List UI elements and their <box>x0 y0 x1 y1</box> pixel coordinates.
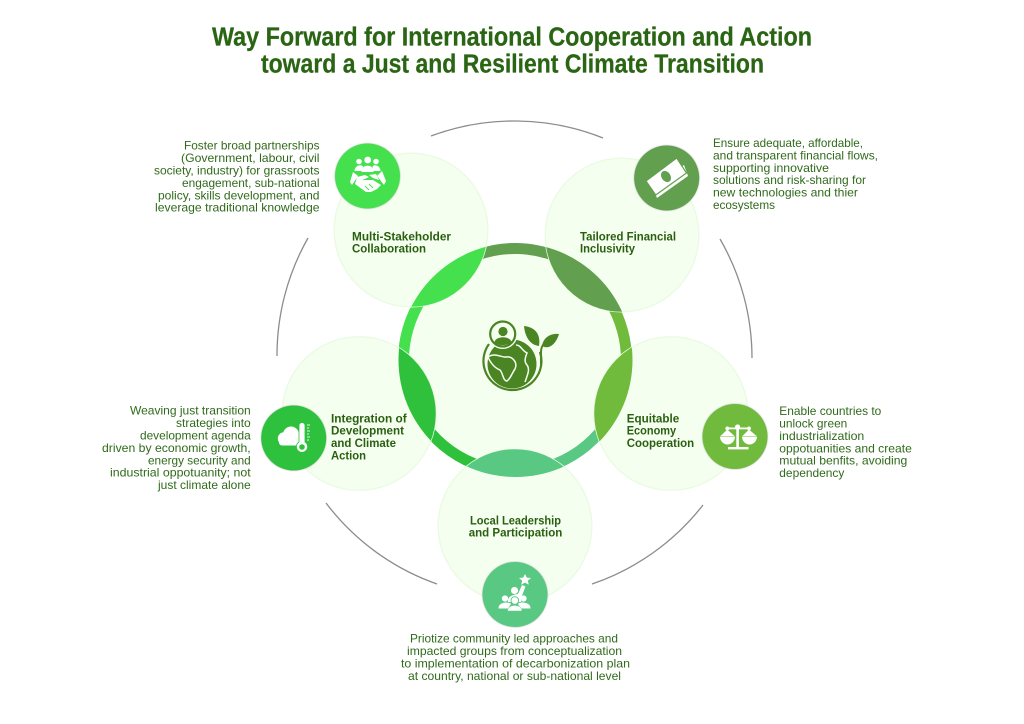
panel: Tailored Financial Inclusivity <box>545 136 878 312</box>
description: partnerships: leverage traditional knowledge <box>155 201 320 215</box>
description: green industrialization: Enable countries to <box>779 404 882 418</box>
description: financial flows: Ensure adequate, affordable, <box>713 136 863 150</box>
title: toward a Just and Resilient Climate Transition <box>261 50 764 78</box>
description: financial flows: solutions and risk-sharing for <box>713 173 866 187</box>
icon: people and handshake <box>335 144 400 208</box>
description: development agenda: industrial oppotuanity; not <box>110 466 251 480</box>
title <box>212 24 812 78</box>
description: financial flows: supporting innovative <box>713 161 829 175</box>
description: financial flows: new technologies and thier <box>713 186 858 200</box>
description: development agenda: energy security and <box>148 453 251 467</box>
label: Equitable Economy Cooperation <box>627 411 694 450</box>
icon: community with star <box>482 562 548 627</box>
description: development agenda: strategies into <box>176 416 251 430</box>
description: financial flows: and transparent financial flows, <box>713 148 878 162</box>
label: Multi-Stakeholder Collaboration <box>352 230 451 256</box>
label: Equitable Economy Cooperation: Equitable <box>627 411 680 425</box>
description: development agenda <box>102 404 251 492</box>
label: Local Leadership and Participation: Local Leadership <box>470 513 561 527</box>
panel: Equitable Economy Cooperation <box>594 337 912 490</box>
description: community led approaches: to implementation of decarbonization plan <box>401 656 630 670</box>
description: community led approaches: impacted groups from conceptualization <box>407 644 622 658</box>
description: partnerships <box>154 139 320 215</box>
icon: globe with person and leaves <box>483 319 559 390</box>
description: green industrialization: mutual benfits, avoiding <box>779 454 907 468</box>
label: Equitable Economy Cooperation: Economy <box>627 424 677 438</box>
panel: Local Leadership and Participation <box>401 449 630 683</box>
description: community led approaches <box>401 632 630 683</box>
description: financial flows <box>713 136 878 212</box>
description: community led approaches: at country, national or sub-national level <box>408 669 621 683</box>
label: Integration of Development and Climate Action: Integration of <box>331 411 407 425</box>
description: green industrialization <box>779 404 912 480</box>
label: Integration of Development and Climate Action <box>331 411 407 462</box>
panel: Multi-Stakeholder Collaboration <box>154 139 488 307</box>
label: Integration of Development and Climate Action: Action <box>331 448 366 462</box>
label: Integration of Development and Climate Action: Development <box>331 424 404 438</box>
icon: banknotes <box>634 146 699 210</box>
description: development agenda: just climate alone <box>157 478 251 492</box>
label: Tailored Financial Inclusivity: Inclusivity <box>580 242 635 256</box>
description: financial flows: ecosystems <box>713 198 775 212</box>
description: partnerships: Foster broad partnerships <box>184 139 320 153</box>
panel: Integration of Development and Climate Action <box>102 337 436 492</box>
description: partnerships: engagement, sub-national <box>182 176 320 190</box>
label: Tailored Financial Inclusivity: Tailored Financial <box>580 230 676 244</box>
label: Equitable Economy Cooperation: Cooperation <box>627 436 694 450</box>
label: Multi-Stakeholder Collaboration: Multi-Stakeholder <box>352 230 451 244</box>
description: development agenda: driven by economic growth, <box>102 441 251 455</box>
title: Way Forward for International Cooperation and Action <box>212 24 812 52</box>
description: green industrialization: dependency <box>779 466 844 480</box>
description: partnerships: society, industry) for grassroots <box>154 164 320 178</box>
central hub ring <box>404 248 626 472</box>
label: Tailored Financial Inclusivity <box>580 230 676 256</box>
description: green industrialization: unlock green <box>779 416 847 430</box>
description: partnerships: (Government, labour, civil <box>181 151 320 165</box>
icon: balance scales <box>702 404 768 469</box>
description: development agenda: Weaving just transition <box>130 404 251 418</box>
description: community led approaches: Priotize community led approaches and <box>410 632 618 646</box>
label: Local Leadership and Participation: and Participation <box>469 526 562 540</box>
description: green industrialization: industrialization <box>779 429 864 443</box>
outer grey arcs <box>277 121 752 584</box>
description: development agenda: development agenda <box>140 428 251 442</box>
label: Multi-Stakeholder Collaboration: Collaboration <box>352 242 426 256</box>
description: green industrialization: oppotuanities and create <box>779 441 912 455</box>
label: Integration of Development and Climate Action: and Climate <box>331 436 396 450</box>
description: partnerships: policy, skills development, and <box>158 188 320 202</box>
label: Local Leadership and Participation <box>469 513 562 540</box>
icon: cloud and thermometer <box>261 406 326 470</box>
